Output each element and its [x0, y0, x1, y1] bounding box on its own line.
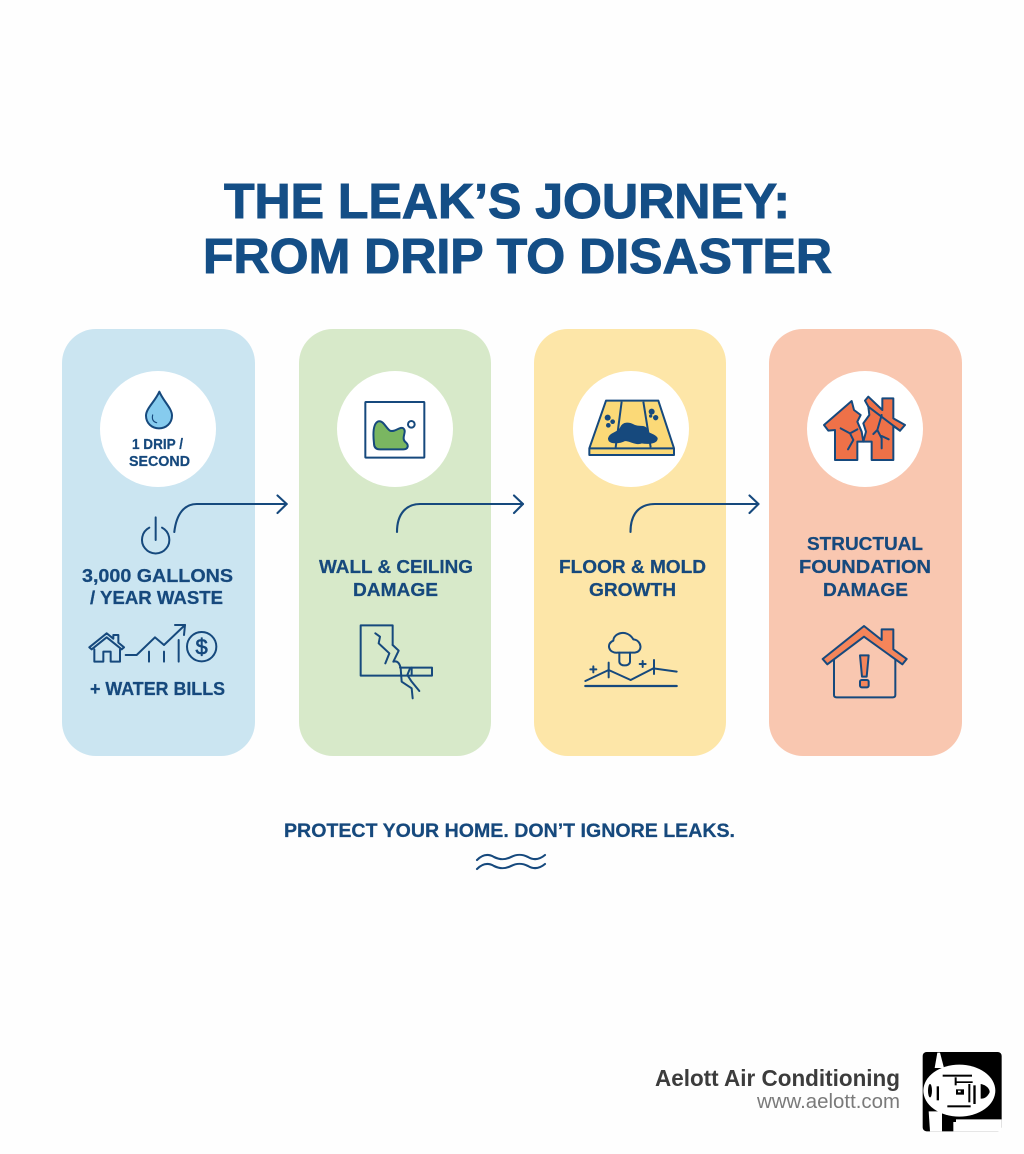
title [203, 175, 832, 284]
icon: stained floorboards [589, 401, 674, 455]
structural damage label: DAMAGE [823, 580, 908, 600]
drip rate label: 1 DRIP / [132, 437, 183, 453]
water bills label: + WATER BILLS [90, 679, 225, 699]
arrow: drip to wall damage [174, 496, 287, 532]
icon: water waves [477, 855, 545, 869]
floor and mold label: FLOOR & MOLD [559, 557, 706, 577]
icon: house, rising cost and dollar: $ [196, 634, 208, 659]
structural damage label: FOUNDATION [799, 557, 931, 577]
arrow: wall damage to floor damage [397, 496, 523, 532]
footer brand text: www.aelott.com [756, 1091, 900, 1113]
icon: mold mushroom [585, 633, 677, 686]
wall damage label: WALL & CEILING [319, 557, 473, 577]
panel: floor and mold growth [534, 329, 726, 756]
footer brand text [655, 1065, 900, 1113]
wall damage label [319, 557, 473, 600]
arrow: floor damage to structural damage [630, 496, 758, 532]
icon: house warning [823, 626, 907, 697]
title: FROM DRIP TO DISASTER [203, 230, 832, 284]
icon: damp patch on wall [365, 402, 424, 458]
panel: wall and ceiling damage [299, 329, 491, 756]
logo [923, 1052, 1002, 1131]
panel: structural foundation damage [769, 329, 962, 756]
drip rate label [129, 437, 190, 470]
structural damage label: STRUCTUAL [807, 534, 923, 554]
waste label: / YEAR WASTE [90, 588, 223, 608]
icon: house, rising cost and dollar [89, 625, 216, 662]
icon: broken house [824, 397, 905, 460]
icon: cracked wall [361, 625, 432, 698]
title: THE LEAK’S JOURNEY: [224, 175, 790, 229]
floor and mold label: GROWTH [589, 580, 676, 600]
floor and mold label [559, 557, 706, 600]
waste label: 3,000 GALLONS [82, 566, 233, 586]
drip rate label: SECOND [129, 454, 190, 470]
structural damage label [799, 534, 931, 600]
icon: timer [142, 517, 169, 553]
icon: water drop [146, 392, 172, 428]
panel: one drip per second [62, 329, 255, 756]
wall damage label: DAMAGE [353, 580, 438, 600]
footer brand text: Aelott Air Conditioning [655, 1065, 900, 1091]
waste label [82, 566, 233, 608]
call to action: PROTECT YOUR HOME. DON’T IGNORE LEAKS. [284, 820, 735, 842]
